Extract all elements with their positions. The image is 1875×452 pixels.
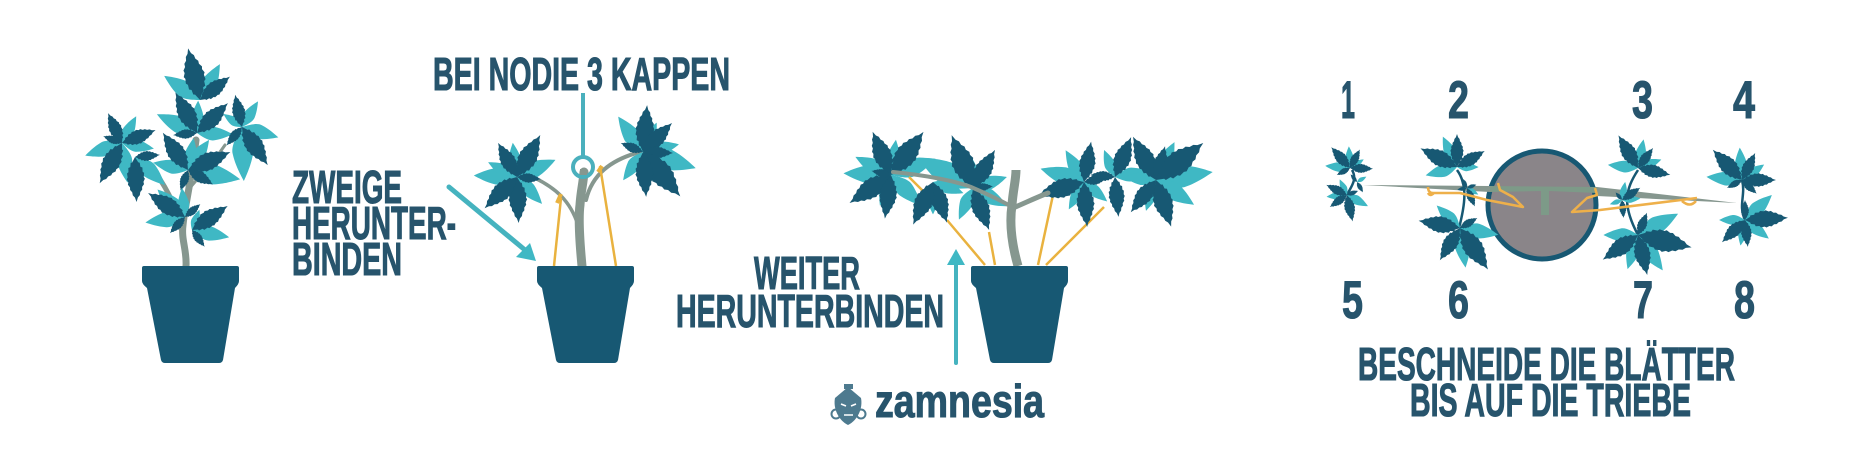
leaf connectors xyxy=(1347,170,1745,235)
arrow: to plant 2 xyxy=(449,187,536,261)
yellow ties top view xyxy=(1428,183,1697,212)
caption: beschneide die blätter bis auf die triebe: BIS AUF DIE TRIEBE xyxy=(1410,374,1691,426)
logo: zamnesia xyxy=(832,375,1044,427)
pot circle from above xyxy=(1488,151,1596,259)
plant 2 yellow ties xyxy=(554,166,616,266)
number labels: 4 xyxy=(1733,71,1755,130)
plant 1 pot xyxy=(142,266,239,363)
plant 1 leaf right xyxy=(221,93,280,181)
logo mask icon xyxy=(832,384,866,425)
plant 3 leaf right 3 xyxy=(1123,132,1214,230)
plant 1 leaf upper middle xyxy=(153,88,234,141)
callout: node ring and line xyxy=(573,93,593,177)
top view small leaf left xyxy=(1349,173,1367,194)
plant 3: further tied down xyxy=(843,125,1214,363)
plant 3 leaf right 2 xyxy=(1090,134,1151,218)
plant 1: untrained plant in pot xyxy=(83,46,280,363)
top view small leaf centre left xyxy=(1457,176,1479,208)
label: zweige herunterbinden xyxy=(292,161,456,285)
plant 1 stem xyxy=(155,140,225,266)
label: weiter herunterbinden: WEITER xyxy=(754,247,860,299)
number labels: 6 xyxy=(1448,271,1469,330)
top view leaf 7 xyxy=(1598,206,1694,277)
plant 1 leaf left xyxy=(83,110,158,188)
plant 2 pot xyxy=(537,266,634,363)
top view leaf 8 xyxy=(1717,190,1788,247)
top view leaf 3 xyxy=(1607,131,1672,181)
plant 3 short tie xyxy=(909,177,922,190)
top view leaf 4 xyxy=(1706,144,1776,197)
plant 1 leaf bottom right xyxy=(187,199,232,249)
plant 2 stem and branches xyxy=(535,152,640,266)
plant 3 branches xyxy=(893,172,1048,208)
label: zweige herunterbinden: HERUNTER- xyxy=(292,197,456,249)
plant 1 leaf centre xyxy=(152,128,242,192)
caption: beschneide die blätter bis auf die triebe xyxy=(1358,338,1735,426)
plant 3 yellow ties xyxy=(947,195,1104,265)
top view stem xyxy=(1363,185,1737,215)
plant 2 leaf left xyxy=(474,130,559,223)
top view leaf 2 xyxy=(1417,134,1488,181)
top view leaf 1 xyxy=(1325,143,1373,178)
logo wordmark: zamnesia xyxy=(875,375,1044,427)
plant 3 leaf left 3 xyxy=(912,131,1011,233)
plant 3 pot xyxy=(971,266,1068,363)
arrow: upwards xyxy=(947,249,965,363)
plant 3 trunk xyxy=(1011,170,1018,266)
top view diagram xyxy=(1324,71,1788,330)
top view leaf 5 xyxy=(1324,178,1370,223)
plant 2 leaf right xyxy=(611,104,699,204)
top view small leaf centre right xyxy=(1609,181,1643,218)
label: zweige herunterbinden: BINDEN xyxy=(292,233,402,285)
number labels: 1 xyxy=(1341,71,1355,130)
plant 3 leaf left 1 xyxy=(843,125,939,220)
plant 1 leaf top xyxy=(159,46,235,107)
number labels: 3 xyxy=(1632,71,1653,130)
plant 1 leaf lower left xyxy=(126,150,170,202)
top view leaf 6 xyxy=(1417,201,1500,275)
number labels xyxy=(1341,71,1755,330)
label: weiter herunterbinden xyxy=(676,247,944,337)
label: zweige herunterbinden: ZWEIGE xyxy=(292,161,402,213)
number labels: 5 xyxy=(1342,271,1363,330)
number labels: 8 xyxy=(1734,271,1755,330)
plant 2: topped plant tied down xyxy=(474,93,699,363)
plant 3 leaf left 2 xyxy=(905,176,966,229)
label: bei nodie 3 kappen: BEI NODIE 3 KAPPEN xyxy=(433,48,730,100)
plant 1 leaf bottom left xyxy=(143,184,203,236)
number labels: 7 xyxy=(1633,271,1653,330)
plant 3 leaf right 1 xyxy=(1035,140,1111,228)
number labels: 2 xyxy=(1448,71,1469,130)
label: weiter herunterbinden: HERUNTERBINDEN xyxy=(676,285,944,337)
